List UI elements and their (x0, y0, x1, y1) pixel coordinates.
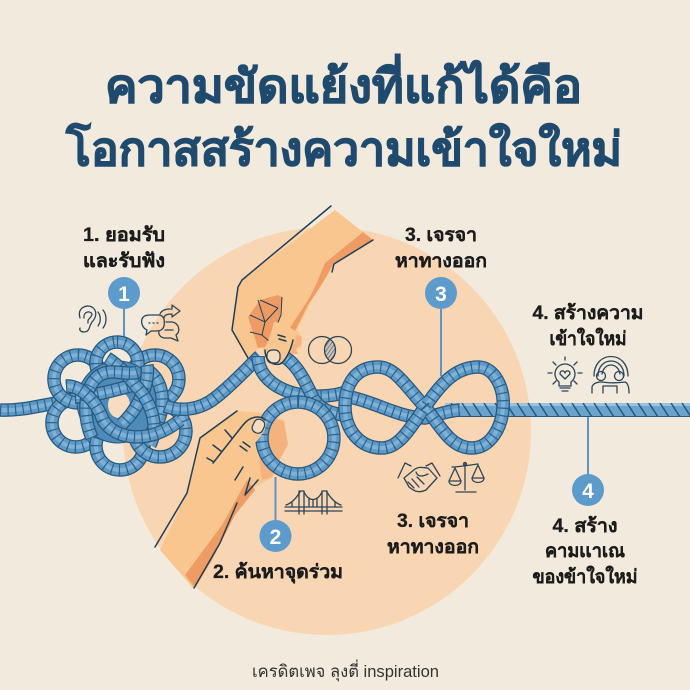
upper thumb (265, 322, 302, 364)
step 3 upper label: 3. เจรจา (405, 225, 477, 246)
step 4 lower label: ของข้าใจใหม่ (532, 565, 638, 588)
credit line: เครดิตเพจ ลุงตี่ inspiration (252, 659, 439, 682)
icon: speech bubbles (142, 305, 180, 341)
step 4 upper label (532, 302, 644, 350)
lower thumb (213, 417, 266, 463)
step 3 upper label: หาทางออก (395, 251, 487, 272)
step 2 marker (260, 477, 292, 552)
step 3 lower label: 3. เจรจา (397, 511, 469, 532)
icon: handshake (398, 463, 440, 492)
step 4 lower label: คามเเาเณ (545, 541, 625, 562)
step 1 label (83, 225, 165, 272)
step 2 marker: 2 (270, 526, 281, 549)
step 4 marker: 4 (582, 480, 594, 503)
step 1 marker: 1 (118, 283, 130, 306)
peach circle backdrop (123, 227, 531, 635)
straight rope right (445, 403, 690, 417)
step 4 marker (572, 417, 604, 506)
rope: strand to hand and upper loop (165, 350, 352, 416)
icon: bridge (285, 491, 342, 514)
upper hand (232, 206, 373, 364)
tangled knot (52, 342, 186, 470)
step 3 marker (425, 277, 457, 376)
step 4 lower label: 4. สร้าง (552, 515, 618, 537)
step 4 upper label: เข้าใจใหม่ (550, 327, 626, 350)
step 1 marker (108, 277, 140, 338)
figure-eight knot (345, 367, 503, 448)
step 2 label: 2. ค้นหาจุดร่วม (213, 561, 343, 584)
lower hand (155, 411, 288, 588)
step 4 upper label: 4. สร้างความ (532, 302, 644, 324)
icon: two people under arc (592, 356, 629, 393)
title: ความขัดแย้งที่แก้ได้คือ (105, 54, 582, 112)
icon: light bulb with heart (548, 357, 582, 391)
icon: venn diagram (308, 336, 352, 364)
step 1 label: 1. ยอมรับ (83, 225, 165, 246)
step 3 upper label (395, 225, 487, 272)
icon: ear (79, 306, 106, 332)
icon: balance scales (449, 462, 484, 492)
ring rope (262, 402, 334, 474)
left rope (0, 403, 56, 410)
step 4 lower label (532, 515, 638, 588)
step 3 marker: 3 (435, 283, 447, 306)
title: โอกาสสร้างความเข้าใจใหม่ (65, 122, 622, 175)
step 3 lower label: หาทางออก (387, 537, 479, 558)
step 1 label: และรับฟัง (83, 251, 165, 272)
step 3 lower label (387, 511, 479, 558)
title (65, 54, 622, 175)
